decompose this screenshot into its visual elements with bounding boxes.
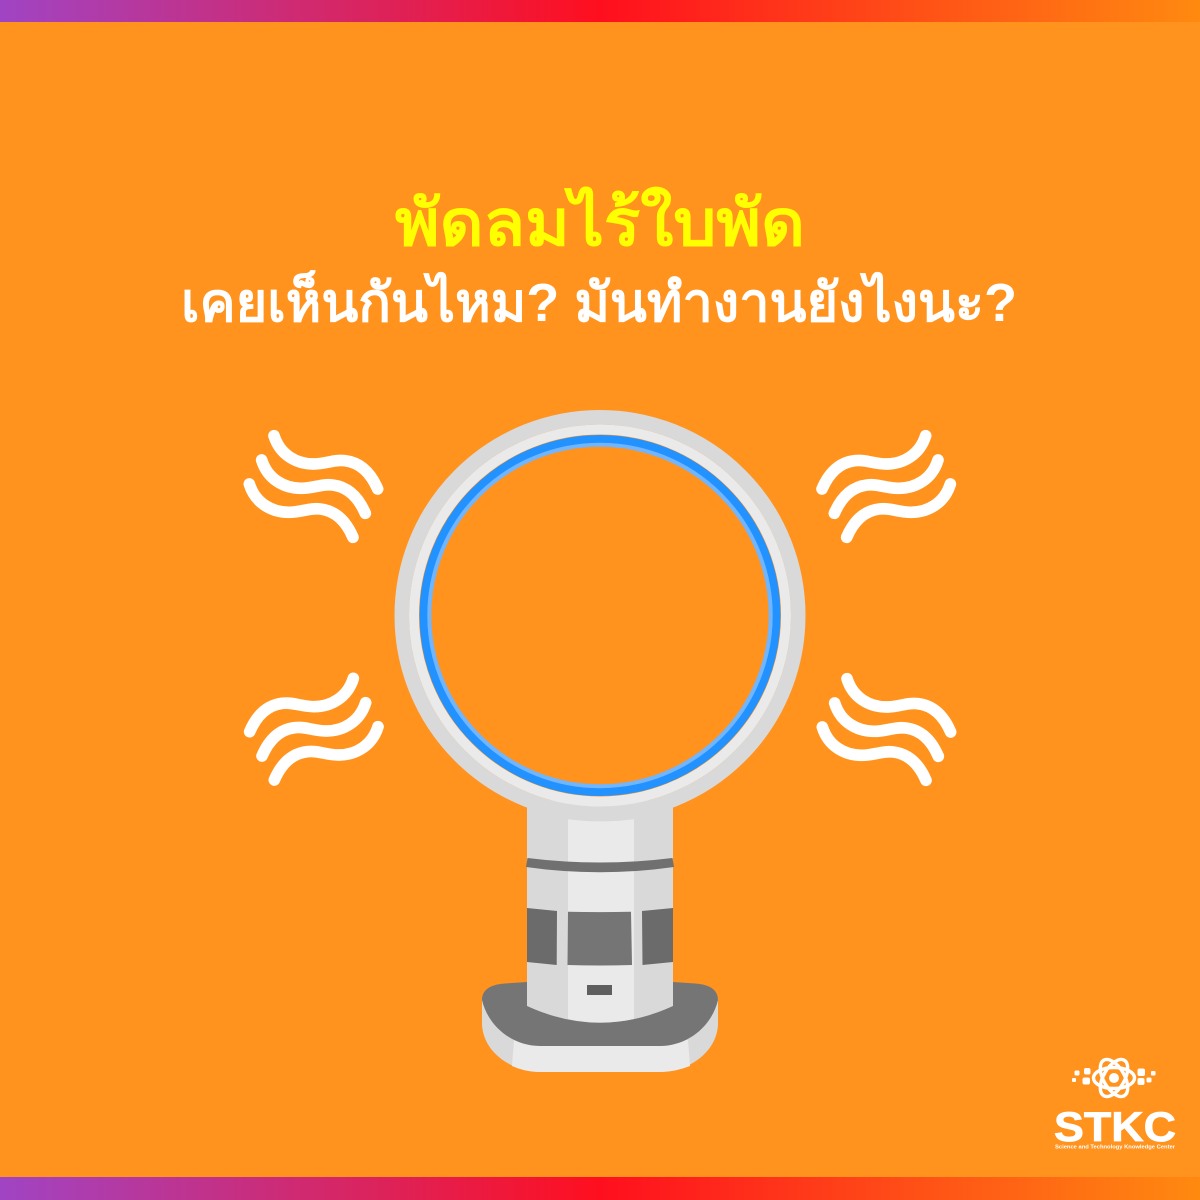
logo tagline: Science and Technology Knowledge Center [1055, 1144, 1176, 1150]
title line 2: เคยเห็นกันไหม? มันทำงานยังไงนะ? [181, 271, 1017, 333]
center vent [568, 912, 632, 966]
fan base [482, 982, 718, 1072]
top gradient bar [0, 0, 1200, 22]
right vent [642, 908, 673, 965]
stem band [526, 858, 674, 872]
fan stem [526, 800, 674, 1023]
fan ring [402, 417, 798, 814]
title [181, 186, 1017, 333]
logo: STKC [1054, 1055, 1176, 1150]
icon: wind bottom right [822, 679, 951, 780]
icon: wind top left [249, 436, 378, 537]
control button [587, 985, 612, 995]
icon: wind bottom left [250, 678, 378, 780]
icon: wind top right [822, 436, 950, 537]
bladeless fan illustration [402, 417, 798, 1072]
logo wordmark: STKC [1054, 1103, 1176, 1150]
bottom gradient bar [0, 1177, 1200, 1200]
title line 1: พัดลมไร้ใบพัด [395, 186, 805, 259]
left vent [527, 908, 557, 965]
logo atom icon [1072, 1055, 1156, 1101]
